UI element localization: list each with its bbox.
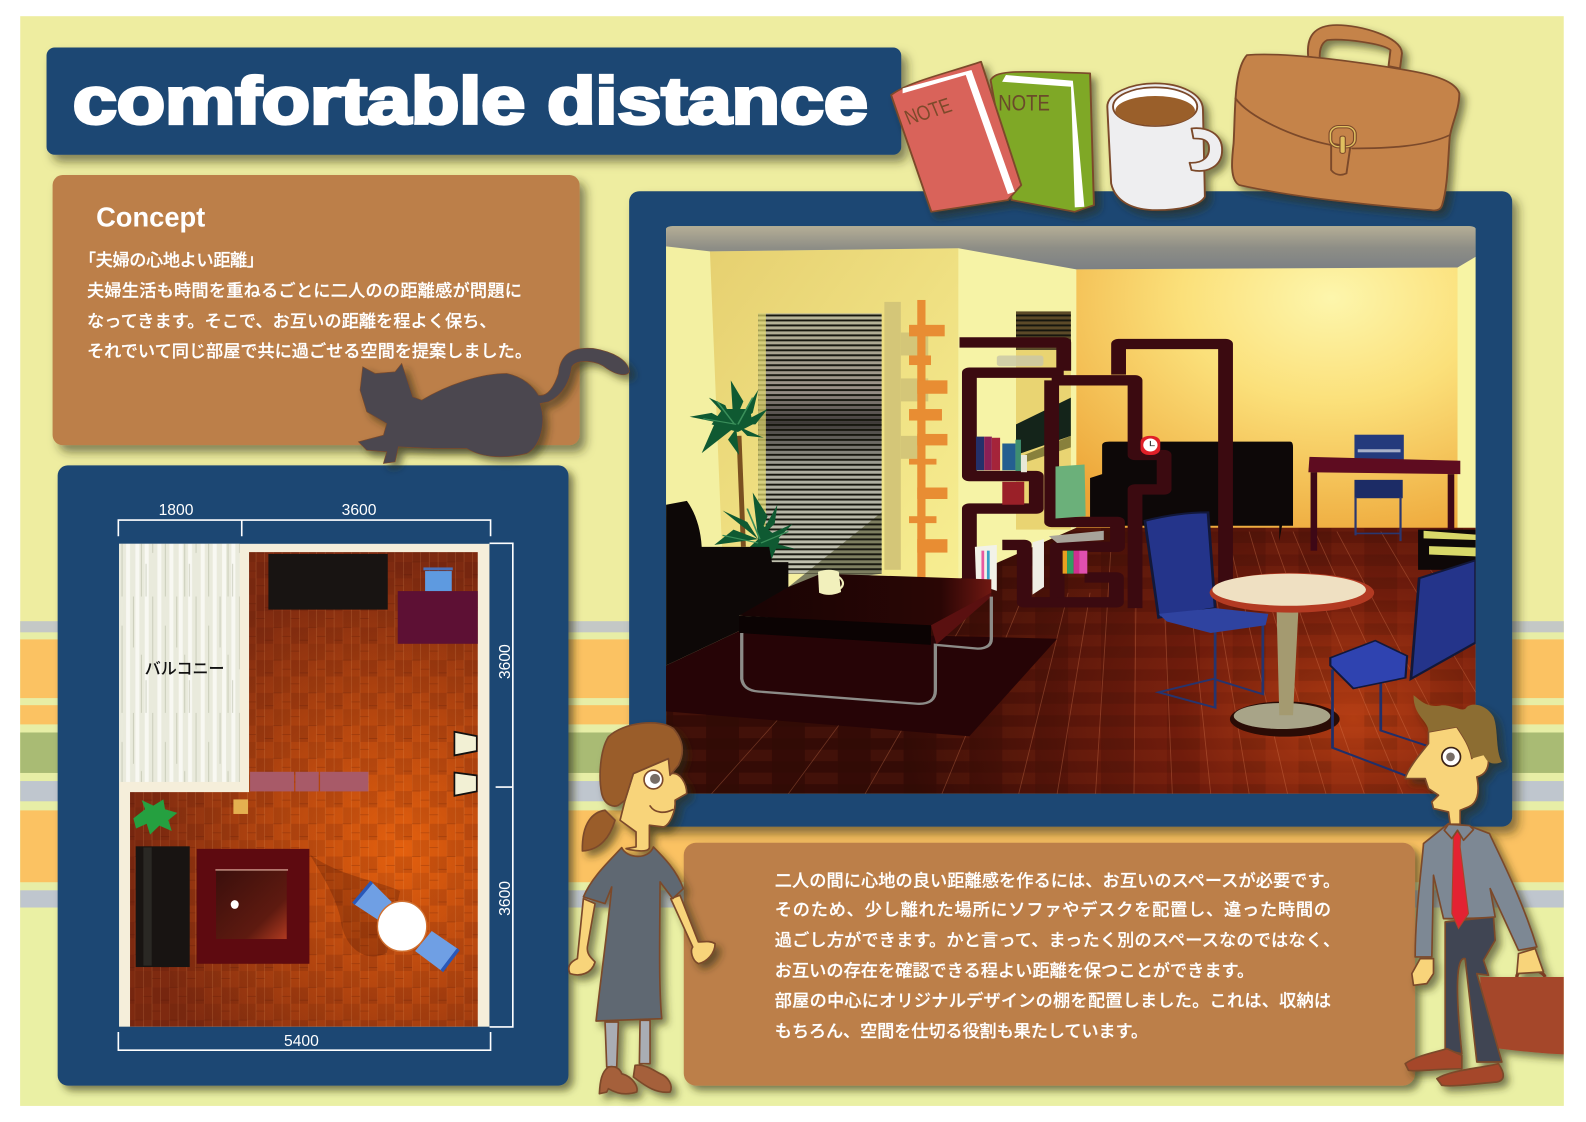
floor (666, 528, 1476, 794)
explanation text: もちろん、空間を仕切る役割も果たしています。 (775, 1021, 1148, 1041)
concept heading: Concept (96, 202, 205, 233)
dimension lines (118, 520, 513, 1050)
explanation text: 部屋の中心にオリジナルデザインの棚を配置しました。これは、収納は (775, 991, 1331, 1011)
left sofa (136, 846, 190, 967)
concept body text: 夫婦生活も時間を重ねるごとに二人のの距離感が問題に (87, 280, 522, 300)
explanation text: そのため、少し離れた場所にソファやデスクを配置し、違った時間の (775, 900, 1331, 920)
balcony label: バルコニー (145, 660, 225, 678)
plant (133, 799, 177, 835)
window blinds (758, 313, 882, 574)
far blue chair (1330, 560, 1476, 776)
icon: red notebook: NOTE (998, 92, 1050, 116)
dimension labels: 3600 (342, 502, 377, 519)
panel: floor plan (58, 465, 568, 1086)
explanation text: 二人の間に心地の良い距離感を作るには、お互いのスペースが必要です。 (775, 870, 1340, 890)
explanation text: お互いの存在を確認できる程よい距離を保つことができます。 (775, 960, 1254, 980)
rug (197, 849, 309, 964)
character: woman (569, 723, 715, 1094)
shelving unit (960, 342, 1226, 608)
coffee table (739, 574, 991, 704)
plant (690, 380, 795, 558)
icon: coffee mug (1107, 83, 1222, 210)
panel: main room render (629, 191, 1512, 827)
second window (1016, 311, 1071, 530)
dimension labels: 5400 (284, 1033, 319, 1050)
books on shelf (975, 355, 1104, 595)
desk chair (423, 567, 453, 591)
alarm clock (1141, 436, 1160, 455)
icon: briefcase (1232, 25, 1459, 210)
icon: red notebook (891, 62, 1094, 212)
near blue chair (1145, 512, 1268, 708)
shelf top view (250, 772, 368, 791)
dimension labels: 3600 (497, 644, 514, 679)
concept body text: それでいて同じ部屋で共に過ごせる空間を提案しました。 (87, 341, 532, 361)
white stools (454, 732, 477, 796)
concept body text: なってきます。そこで、お互いの距離を程よく保ち、 (87, 311, 497, 331)
dimension labels (159, 502, 514, 1050)
floor plan drawing (119, 544, 489, 1027)
icon: red notebook: NOTE (901, 93, 955, 129)
icon: cat (358, 348, 629, 464)
side box (233, 799, 248, 814)
character: man (1405, 695, 1565, 1086)
round table (1210, 573, 1374, 737)
title banner: comfortable distance (73, 63, 868, 137)
round rug (666, 631, 1057, 736)
3D interior picture (666, 226, 1476, 794)
desk and desk chair (1308, 435, 1460, 551)
coffee table (215, 870, 288, 939)
round table (377, 901, 427, 951)
dimension labels: 3600 (497, 881, 514, 916)
explanation text (775, 870, 1340, 1041)
mug (818, 570, 843, 595)
panel: concept (53, 175, 580, 445)
back sofa top view (268, 554, 388, 610)
back sofa (1090, 442, 1293, 541)
left sofa (666, 501, 788, 665)
explanation text: 過ごし方ができます。かと言って、まったく別のスペースなのではなく、 (775, 930, 1340, 950)
title banner (47, 48, 901, 155)
shadow of shelf on wall (884, 302, 928, 570)
dimension labels: 1800 (159, 502, 194, 519)
concept body text: 「夫婦の心地よい距離」 (79, 250, 264, 270)
stools (1418, 530, 1476, 570)
panel: explanation (684, 843, 1415, 1086)
dining chairs (353, 882, 458, 971)
concept body text (79, 250, 532, 361)
desk (398, 591, 478, 644)
